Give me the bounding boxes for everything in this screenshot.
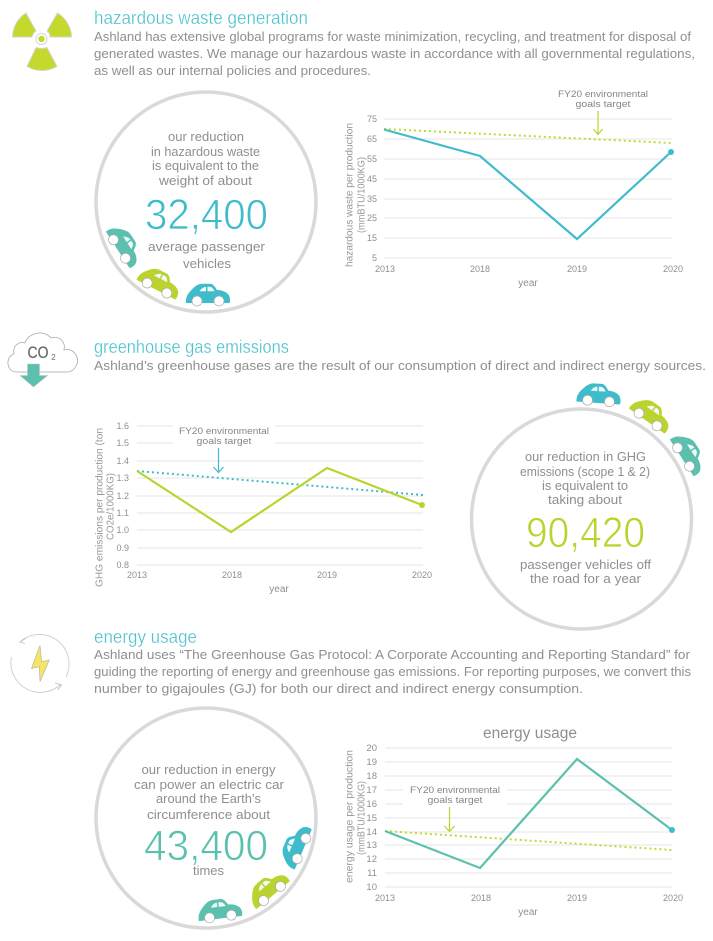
y-axis ticks: 17 bbox=[366, 785, 377, 796]
section: hazardous waste generation bbox=[12, 8, 695, 312]
x-axis title: year bbox=[518, 907, 538, 918]
heading: energy usage: energy usage bbox=[94, 627, 197, 647]
x-axis ticks: 2019 bbox=[567, 264, 587, 274]
x-axis ticks: 2020 bbox=[412, 570, 432, 580]
x-axis ticks: 2013 bbox=[375, 893, 395, 903]
annotation: FY20 target: FY20 environmental bbox=[179, 426, 269, 437]
text block: hazardous waste description: as well as our internal policies and procedures. bbox=[94, 63, 371, 78]
icon: teal car bbox=[667, 429, 710, 478]
x-axis ticks: 2013 bbox=[127, 570, 147, 580]
annotation: FY20 target: FY20 environmental bbox=[410, 785, 500, 796]
icon: blue car bbox=[186, 284, 230, 306]
x-axis ticks: 2018 bbox=[222, 570, 242, 580]
icon: CO2 cloud with down arrow: CO bbox=[28, 343, 48, 362]
heading: hazardous waste generation: hazardous waste generation bbox=[94, 8, 308, 28]
section: greenhouse gas emissions bbox=[8, 333, 710, 629]
icon: teal car bbox=[103, 221, 146, 270]
y-axis ticks bbox=[367, 114, 377, 263]
text: energy reduction statement: our reduction in energy bbox=[142, 763, 276, 777]
x-axis ticks: 2018 bbox=[470, 264, 490, 274]
x-axis ticks: 2020 bbox=[663, 264, 683, 274]
text block: energy usage description: guiding the reporting of energy and greenhouse gas emissions. For reporting purposes, we convert this bbox=[94, 664, 691, 679]
text: GHG reduction statement: is equivalent to bbox=[542, 479, 628, 493]
y-axis title bbox=[94, 428, 116, 587]
line chart: hazardous waste per production bbox=[344, 89, 683, 289]
chart title: energy usage bbox=[483, 725, 577, 742]
text: energy reduction statement: can power an electric car bbox=[134, 778, 284, 792]
y-axis ticks: 16 bbox=[366, 799, 377, 810]
target line bbox=[384, 129, 672, 143]
y-axis ticks: 45 bbox=[367, 174, 377, 184]
y-axis ticks: 1.1 bbox=[116, 508, 129, 518]
text: energy reduction statement bbox=[134, 763, 284, 822]
icon: CO2 cloud with down arrow bbox=[8, 333, 78, 387]
text: energy reduction statement: circumference about bbox=[147, 808, 271, 822]
annotation: FY20 target: goals target bbox=[196, 436, 252, 447]
number: 32,400: 32,400 bbox=[145, 191, 268, 239]
line chart: energy usage per production bbox=[344, 725, 683, 918]
y-axis ticks bbox=[116, 421, 129, 570]
x-axis ticks: 2013 bbox=[375, 264, 395, 274]
text: energy reduction statement: around the Earth’s bbox=[156, 792, 261, 806]
y-axis title: hazardous waste per production bbox=[344, 123, 356, 267]
icon: lightning bolt in circular arrows bbox=[11, 634, 69, 692]
text: hazardous waste reduction statement: in hazardous waste bbox=[151, 145, 260, 159]
text: passenger vehicles off the road: passenger vehicles off bbox=[520, 558, 652, 572]
panel: hazardous waste equivalence circle bbox=[96, 92, 316, 312]
number: 43,400: 43,400 bbox=[144, 822, 268, 870]
number: 90,420: 90,420 bbox=[526, 509, 645, 557]
text: average passenger vehicles: average passenger bbox=[148, 240, 265, 254]
text: passenger vehicles off the road: the road for a year bbox=[530, 572, 641, 586]
y-axis title: (mmBTU/1000KG) bbox=[356, 781, 368, 855]
icon: blue car bbox=[576, 382, 622, 408]
text: average passenger vehicles bbox=[148, 240, 265, 271]
y-axis ticks: 1.4 bbox=[116, 456, 129, 466]
text block: hazardous waste description bbox=[94, 29, 695, 78]
icon: teal car bbox=[196, 897, 243, 924]
data line bbox=[137, 468, 422, 532]
arrow: target pointer bbox=[214, 448, 224, 472]
text: GHG reduction statement: taking about bbox=[548, 493, 623, 507]
text block: energy usage description bbox=[94, 647, 691, 696]
y-axis ticks: 12 bbox=[366, 854, 377, 865]
text block: energy usage description: Ashland uses “The Greenhouse Gas Protocol: A Corporate Accounting and Reporting Standard” for bbox=[94, 647, 691, 662]
icon: blue car bbox=[277, 821, 315, 871]
end point marker bbox=[668, 149, 674, 155]
y-axis ticks: 1.0 bbox=[116, 525, 129, 535]
x-axis title: year bbox=[518, 278, 538, 289]
y-axis title: (mmBTU/1000KG) bbox=[356, 157, 368, 233]
x-axis ticks bbox=[375, 893, 683, 903]
x-axis ticks: 2018 bbox=[471, 893, 491, 903]
y-axis title: energy usage per production bbox=[344, 750, 356, 883]
icon: lime car bbox=[135, 263, 184, 302]
y-axis ticks: 20 bbox=[366, 743, 377, 754]
annotation: FY20 target: goals target bbox=[576, 99, 631, 110]
y-axis title bbox=[344, 750, 368, 883]
arrow: target pointer bbox=[444, 807, 454, 832]
annotation: FY20 target: goals target bbox=[428, 795, 483, 806]
y-axis ticks: 1.5 bbox=[116, 438, 129, 448]
panel: energy equivalence circle bbox=[96, 708, 316, 928]
y-axis ticks: 13 bbox=[366, 840, 377, 851]
x-axis ticks bbox=[127, 570, 432, 580]
y-axis ticks: 65 bbox=[367, 134, 377, 144]
arrow: target pointer bbox=[594, 111, 602, 134]
y-axis ticks: 1.2 bbox=[116, 491, 129, 501]
y-axis ticks: 10 bbox=[366, 882, 377, 893]
data line bbox=[385, 759, 672, 868]
y-axis ticks: 0.9 bbox=[116, 543, 129, 553]
y-axis ticks: 15 bbox=[367, 233, 377, 243]
text: hazardous waste reduction statement bbox=[151, 130, 260, 188]
text: hazardous waste reduction statement: is equivalent to the bbox=[152, 159, 259, 173]
text: average passenger vehicles: vehicles bbox=[183, 257, 231, 271]
y-axis title bbox=[344, 123, 368, 267]
y-axis ticks: 35 bbox=[367, 194, 377, 204]
text block: greenhouse gas description: Ashland’s greenhouse gases are the result of our consumption of direct and indirect energy sources. bbox=[94, 358, 706, 373]
y-axis ticks: 15 bbox=[366, 813, 377, 824]
y-axis title: GHG emissions per production (ton bbox=[94, 428, 106, 587]
data line bbox=[384, 130, 671, 239]
text: passenger vehicles off the road bbox=[520, 558, 652, 586]
y-axis ticks: 19 bbox=[366, 757, 377, 768]
x-axis ticks bbox=[375, 264, 683, 274]
y-axis ticks: 5 bbox=[372, 253, 377, 263]
text: times: times bbox=[193, 864, 224, 878]
y-axis ticks: 55 bbox=[367, 154, 377, 164]
y-axis ticks: 11 bbox=[367, 868, 377, 879]
annotation background bbox=[173, 421, 275, 448]
target line bbox=[385, 831, 672, 850]
y-axis ticks: 1.6 bbox=[116, 421, 129, 431]
end point marker bbox=[419, 502, 425, 508]
y-axis ticks: 18 bbox=[366, 771, 377, 782]
heading: greenhouse gas emissions: greenhouse gas emissions bbox=[94, 337, 289, 357]
annotation: FY20 target bbox=[558, 89, 648, 110]
x-axis ticks: 2019 bbox=[317, 570, 337, 580]
x-axis ticks: 2020 bbox=[663, 893, 683, 903]
icon: radiation symbol bbox=[12, 13, 72, 71]
x-axis ticks: 2019 bbox=[567, 893, 587, 903]
annotation background bbox=[403, 784, 507, 807]
text block: energy usage description: number to gigajoules (GJ) for both our direct and indirect energy consumption. bbox=[94, 681, 583, 696]
y-axis ticks: 75 bbox=[367, 114, 377, 124]
x-axis title: year bbox=[269, 584, 289, 595]
y-axis ticks: 1.3 bbox=[116, 473, 129, 483]
line chart: GHG emissions per production bbox=[94, 421, 432, 595]
annotation: FY20 target bbox=[179, 426, 269, 447]
icon: lime car bbox=[244, 866, 292, 912]
annotation: FY20 target bbox=[410, 785, 500, 806]
text: GHG reduction statement: our reduction in GHG bbox=[525, 450, 646, 464]
section: energy usage bbox=[11, 627, 691, 928]
text: hazardous waste reduction statement: our reduction bbox=[168, 130, 244, 144]
icon: CO2 cloud with down arrow: 2 bbox=[51, 353, 56, 362]
text: hazardous waste reduction statement: weight of about bbox=[158, 174, 253, 188]
target line bbox=[137, 471, 423, 495]
text block: hazardous waste description: generated wastes. We manage our hazardous waste in accordance with all governmental regulations, bbox=[94, 46, 695, 61]
y-axis ticks: 25 bbox=[367, 213, 377, 223]
text: GHG reduction statement bbox=[520, 450, 650, 507]
panel: GHG equivalence circle bbox=[472, 382, 710, 629]
y-axis ticks bbox=[366, 743, 377, 893]
y-axis ticks: 14 bbox=[366, 827, 377, 838]
text: GHG reduction statement: emissions (scope 1 & 2) bbox=[520, 465, 650, 479]
text block: hazardous waste description: Ashland has extensive global programs for waste minimization, recycling, and treatment for disposal of bbox=[94, 29, 691, 44]
annotation: FY20 target: FY20 environmental bbox=[558, 89, 648, 100]
end point marker bbox=[669, 827, 675, 833]
icon: lime car bbox=[627, 393, 676, 436]
y-axis title: CO2e/1000KG) bbox=[104, 473, 116, 540]
y-axis ticks: 0.8 bbox=[116, 560, 129, 570]
